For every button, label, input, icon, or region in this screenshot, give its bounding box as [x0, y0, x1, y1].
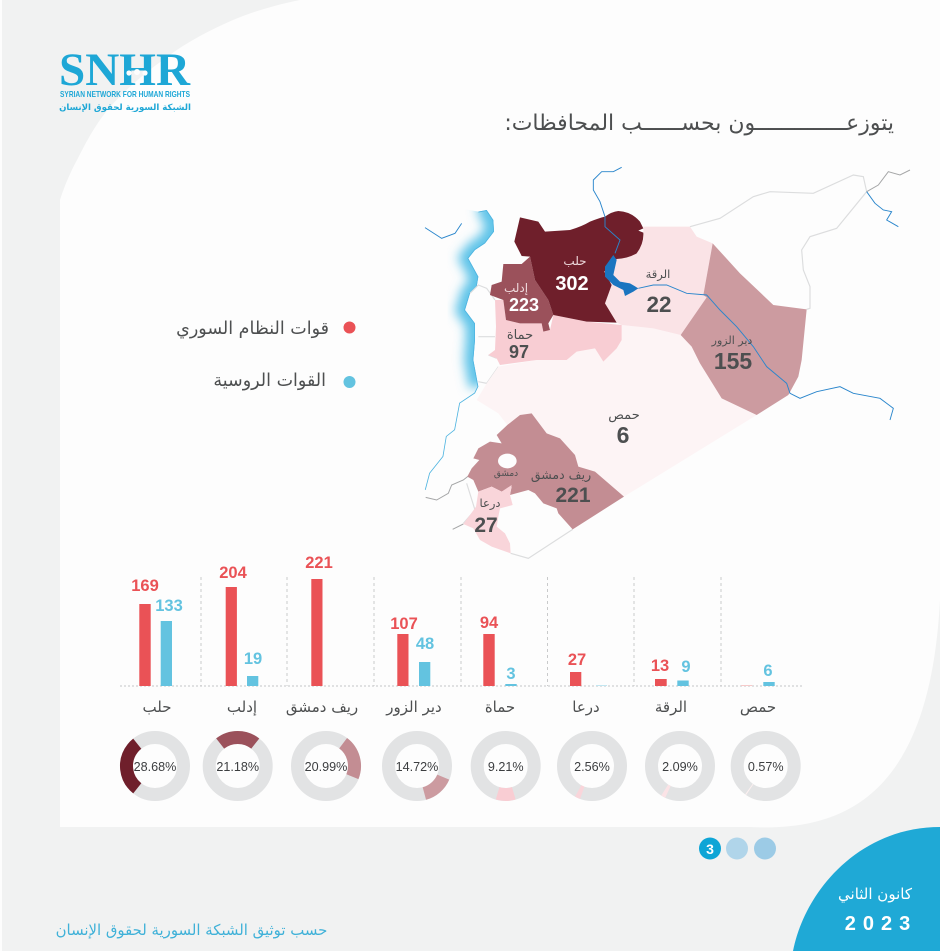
bars: Rif Dimashq: ريف دمشق [286, 698, 358, 716]
donut: Homs 0.57% [726, 726, 805, 806]
bar chart [120, 554, 803, 716]
Hama [488, 300, 622, 365]
country outline [463, 175, 867, 558]
bars: Homs: حمص [740, 698, 776, 716]
bars: Hama: 3 [506, 665, 516, 683]
donut: Deir ez-Zor 14.72%: 14.72% [396, 760, 438, 774]
donut: Homs 0.57%: 0.57% [748, 760, 784, 774]
bars: Homs: 6 [763, 662, 773, 680]
map labels: 27 [474, 514, 498, 537]
donut: Hama 9.21% [470, 731, 541, 801]
bars: Aleppo: 169 [131, 577, 159, 595]
map labels: إدلب [504, 281, 528, 295]
map labels: ريف دمشق [531, 467, 591, 483]
Homs [477, 325, 757, 497]
map labels: 97 [509, 342, 529, 362]
bars: Aleppo [131, 577, 183, 716]
Aleppo [514, 211, 643, 323]
map labels: 155 [714, 348, 752, 374]
donut: Idlib 21.18% [198, 726, 278, 806]
bars: Rif Dimashq: 221 [305, 554, 333, 572]
bars: Deir ez-Zor: 107 [390, 615, 418, 633]
Raqqa [604, 227, 713, 335]
map labels: 6 [617, 422, 629, 448]
donut: Aleppo 28.68% [115, 726, 195, 806]
donut: Rif Dimashq 20.99%: 20.99% [305, 760, 347, 774]
bars: Deir ez-Zor: دير الزور [385, 698, 442, 716]
legend [176, 319, 356, 391]
bars: Deir ez-Zor [385, 615, 442, 716]
map labels: 22 [646, 292, 672, 317]
bars: Aleppo: 133 [155, 597, 183, 615]
bars: Raqqa: الرقة [655, 698, 687, 716]
map of Syria by governorate [425, 167, 910, 558]
bars: Aleppo: حلب [143, 698, 171, 716]
donut: Daraa 2.56%: 2.56% [574, 760, 610, 774]
source note: حسب توثيق الشبكة السورية لحقوق الإنسان [56, 921, 327, 939]
logo: SYRIAN NETWORK FOR HUMAN RIGHTS [60, 89, 190, 99]
bars: Idlib: 19 [244, 650, 262, 668]
map labels: حمص [608, 408, 640, 423]
logo: الشبكة السورية لحقوق الإنسان [59, 103, 191, 113]
bars: Raqqa [651, 657, 691, 716]
donut: Idlib 21.18%: 21.18% [216, 760, 259, 774]
bars: Raqqa: 9 [681, 658, 691, 676]
map labels: دمشق [494, 469, 518, 479]
map labels: درعا [479, 496, 501, 511]
bars: Daraa: درعا [572, 698, 600, 716]
map labels: حماة [507, 328, 533, 343]
lake [605, 255, 638, 296]
bars: Idlib: 204 [219, 564, 248, 582]
date badge [793, 827, 940, 951]
donut: Raqqa 2.09%: 2.09% [662, 760, 698, 774]
donut: Daraa 2.56% [555, 729, 629, 803]
donut: Deir ez-Zor 14.72% [380, 729, 454, 803]
Daraa [463, 485, 513, 553]
title: يتوزعــــــــــــــون بحســــــب المحافظات: [504, 111, 894, 136]
Deir ez-Zor [681, 243, 807, 415]
bars: Rif Dimashq [286, 554, 358, 716]
map labels: الرقة [646, 267, 670, 282]
sea coast glow [426, 210, 494, 490]
map labels: 223 [509, 295, 539, 315]
donut: Rif Dimashq 20.99% [286, 726, 366, 806]
bars: Hama: 94 [480, 614, 499, 632]
map labels: 302 [555, 273, 589, 295]
date badge: كانون الثاني [838, 885, 913, 904]
Idlib [490, 257, 553, 332]
page indicator [699, 838, 776, 860]
bars: Daraa: 27 [568, 651, 586, 669]
bars: Homs [740, 662, 776, 716]
date badge: 2023 [845, 913, 917, 935]
map labels: دير الزور [711, 334, 752, 347]
map labels: حلب [563, 254, 587, 268]
donut: Raqqa 2.09% [642, 728, 718, 804]
bars: Idlib [219, 564, 262, 716]
bars: Raqqa: 13 [651, 657, 669, 675]
bars: Idlib: إدلب [227, 698, 257, 716]
legend: القوات الروسية [213, 371, 326, 391]
rivers [425, 167, 898, 420]
bars: Hama [480, 614, 517, 716]
bars: Deir ez-Zor: 48 [416, 635, 434, 653]
map labels: 221 [555, 484, 591, 507]
bars: Daraa [568, 651, 607, 716]
donut: Aleppo 28.68%: 28.68% [134, 760, 176, 774]
logo: SNHR [59, 44, 191, 96]
Rif Dimashq [467, 413, 624, 529]
map labels [474, 254, 752, 537]
page indicator: 3 [706, 841, 714, 857]
bars: Hama: حماة [485, 698, 515, 716]
donut: Hama 9.21%: 9.21% [488, 760, 524, 774]
legend: قوات النظام السوري [176, 319, 329, 339]
